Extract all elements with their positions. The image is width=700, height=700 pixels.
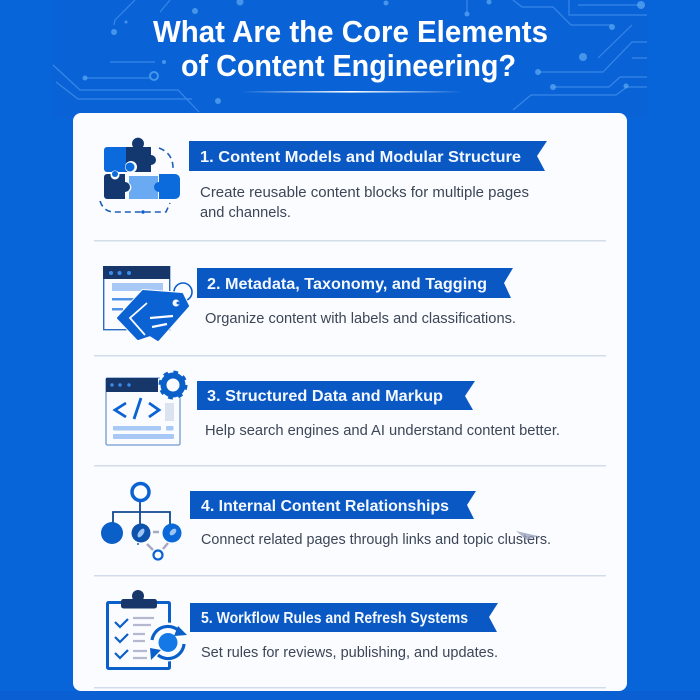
section 3: structured data bbox=[106, 370, 560, 445]
icon: clipboard with refresh bbox=[108, 590, 188, 668]
description 1: Create reusable content blocks for multiple pages bbox=[200, 185, 529, 201]
description 2: Organize content with labels and classifications. bbox=[205, 311, 516, 327]
icon: window with tag bbox=[103, 266, 192, 340]
heading ribbon 5 bbox=[190, 603, 498, 632]
heading ribbon 2 bbox=[197, 268, 513, 298]
header panel with circuit background bbox=[53, 0, 647, 118]
description 4: Connect related pages through links and topic clusters. bbox=[201, 532, 551, 548]
heading ribbon 4 bbox=[190, 491, 476, 519]
title bbox=[153, 14, 548, 83]
heading ribbon 3: 3. Structured Data and Markup bbox=[207, 388, 443, 405]
description 1 bbox=[200, 185, 529, 221]
heading ribbon 2: 2. Metadata, Taxonomy, and Tagging bbox=[207, 276, 487, 293]
section 2: metadata bbox=[103, 266, 516, 340]
heading ribbon 1: 1. Content Models and Modular Structure bbox=[200, 149, 521, 166]
section 5: workflow rules bbox=[108, 590, 498, 668]
icon: puzzle pieces bbox=[100, 138, 180, 214]
title underline bbox=[241, 91, 462, 93]
heading ribbon 5: 5. Workflow Rules and Refresh Systems bbox=[201, 610, 468, 627]
description 5: Set rules for reviews, publishing, and updates. bbox=[201, 645, 498, 661]
heading ribbon 1 bbox=[189, 141, 547, 171]
white content card bbox=[73, 113, 627, 691]
grey cursor mark bbox=[516, 531, 538, 540]
section 1: content models bbox=[100, 138, 547, 221]
icon: node tree bbox=[101, 484, 182, 560]
icon: code window with gear bbox=[106, 370, 188, 445]
title: What Are the Core Elements bbox=[153, 14, 548, 49]
title: of Content Engineering? bbox=[181, 48, 516, 83]
description 3: Help search engines and AI understand content better. bbox=[205, 423, 560, 439]
section 4: internal relationships bbox=[101, 484, 551, 560]
heading ribbon 4: 4. Internal Content Relationships bbox=[201, 498, 449, 515]
description 1: and channels. bbox=[200, 205, 291, 221]
heading ribbon 3 bbox=[197, 381, 475, 410]
